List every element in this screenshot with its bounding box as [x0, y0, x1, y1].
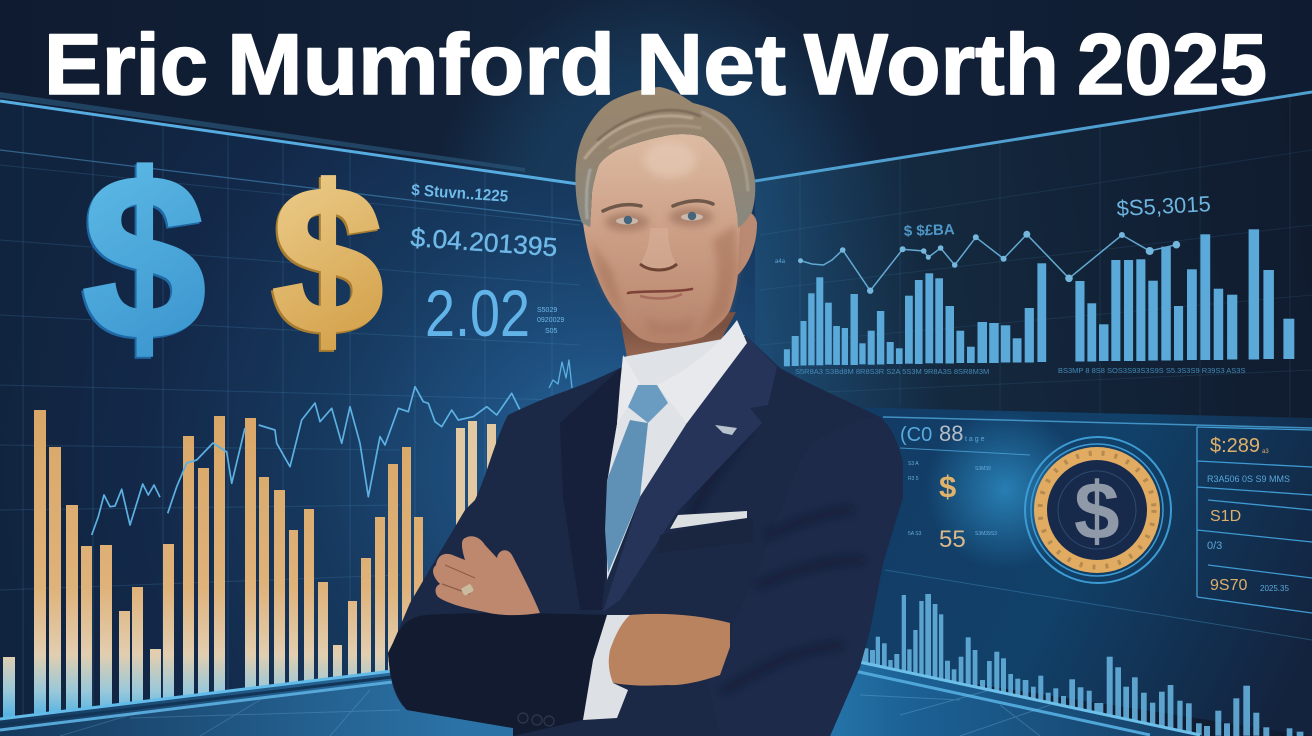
right lapel — [603, 335, 777, 612]
stats text: dashboard left column: 88 — [939, 421, 963, 446]
title: Net — [636, 17, 786, 113]
right ear — [737, 211, 757, 275]
title: 2025 — [1077, 17, 1267, 113]
stats text: dashboard left column: 5A S3 — [908, 531, 922, 537]
jacket buttons — [518, 713, 554, 726]
chart: gold bars — [3, 410, 496, 736]
panel: dashboard table: a3 — [1262, 449, 1269, 455]
panel: dashboard table: 2025.35 — [1260, 584, 1289, 593]
chart: blue line over gold bars — [92, 360, 572, 535]
icon: gold dollar sign: $ — [273, 143, 383, 376]
lapel pin — [715, 425, 737, 435]
icon: dollar coin: $ — [1074, 466, 1120, 557]
stats text: upper right: a4a — [775, 259, 786, 265]
lower left sleeve — [388, 613, 607, 736]
stats text: left screen — [410, 182, 564, 350]
tie — [605, 385, 668, 573]
stats text: upper right: $ $£BA — [904, 221, 955, 240]
chart: lower right blue bars — [862, 594, 1303, 736]
title: Worth — [804, 17, 1059, 113]
axis labels: upper right chart: S5R8A3 S3Bd8M 8R8S3R S2A 5S3M 9R8A3S 8SR8M3M — [795, 367, 989, 376]
left lapel — [560, 367, 622, 610]
eyebrows — [603, 201, 713, 211]
forearm — [609, 614, 730, 686]
axis labels: upper right chart: BS3MP 8 8S8 SOS3S93S3S9S S5.3S3S9 R39S3 AS3S — [1058, 366, 1246, 375]
icon: blue dollar sign: $ — [83, 127, 206, 386]
eyes — [616, 212, 703, 225]
panel: dashboard table — [1197, 427, 1312, 613]
stats text: dashboard left column: S3M39 — [975, 466, 991, 472]
stats text: dashboard left column: R3 5 — [908, 476, 919, 482]
stats text: dashboard left column: S3 A — [908, 461, 919, 467]
chart: upper right blue bars — [784, 229, 1294, 366]
hair — [575, 87, 755, 228]
panel: right upper wall screen — [755, 92, 1312, 425]
panel: dashboard table: S1D — [1210, 508, 1241, 525]
nose — [640, 228, 677, 270]
stats text: dashboard left column: 55 — [939, 526, 966, 553]
face shading — [590, 142, 738, 338]
panel: dashboard table: 9S70 — [1210, 577, 1247, 594]
panel: left wall screen — [0, 92, 760, 736]
stats text: dashboard left column — [900, 421, 997, 553]
icon: gold dollar sign: $ — [271, 145, 381, 378]
neck — [620, 312, 736, 385]
stats text: dashboard left column: (C0 — [900, 424, 932, 446]
mouth — [628, 289, 692, 293]
stats text: dashboard left column: t a g e — [965, 436, 985, 443]
face — [583, 134, 740, 343]
stats text: left screen: S5029 — [537, 307, 557, 314]
collar — [617, 320, 747, 423]
panel: left floor — [0, 640, 760, 736]
stats text: upper right: $S5,3015 — [1116, 191, 1211, 221]
panel: right lower dashboard — [755, 405, 1312, 736]
title: Eric — [44, 17, 208, 113]
stats text: left screen: 2.02 — [425, 276, 530, 350]
stats text: left screen: $.04.201395 — [410, 222, 558, 262]
right sleeve — [707, 417, 903, 736]
icon: blue dollar sign: $ — [81, 129, 204, 388]
stats text: dashboard left column: $ — [939, 469, 956, 504]
title: Mumford — [227, 17, 615, 113]
portrait: man in navy suit — [388, 87, 903, 736]
stats text: upper right — [775, 191, 1211, 265]
panel: right floor — [780, 642, 1205, 736]
stats text: left screen: $ Stuvn..1225 — [411, 182, 509, 206]
hand with ring — [433, 536, 540, 615]
chart: upper right line with dots — [798, 231, 1180, 294]
cuff — [583, 615, 630, 720]
title — [44, 17, 1267, 113]
stats text: left screen: S05 — [545, 328, 558, 335]
icon: dollar coin — [1025, 437, 1171, 583]
suit jacket — [388, 335, 903, 736]
panel: dashboard table: R3A506 0S S9 MMS — [1207, 474, 1290, 484]
shirt — [607, 335, 745, 580]
stats text: dashboard left column: S3M39S3 — [975, 531, 997, 537]
panel: dashboard table: $:289 — [1210, 435, 1260, 457]
hair streaks — [585, 110, 748, 218]
breast pocket — [657, 511, 753, 553]
axis labels: upper right chart — [795, 366, 1246, 376]
panel: dashboard table: 0/3 — [1207, 540, 1222, 552]
stats text: left screen: 0920029 — [537, 317, 564, 324]
sleeve folds — [690, 430, 860, 690]
